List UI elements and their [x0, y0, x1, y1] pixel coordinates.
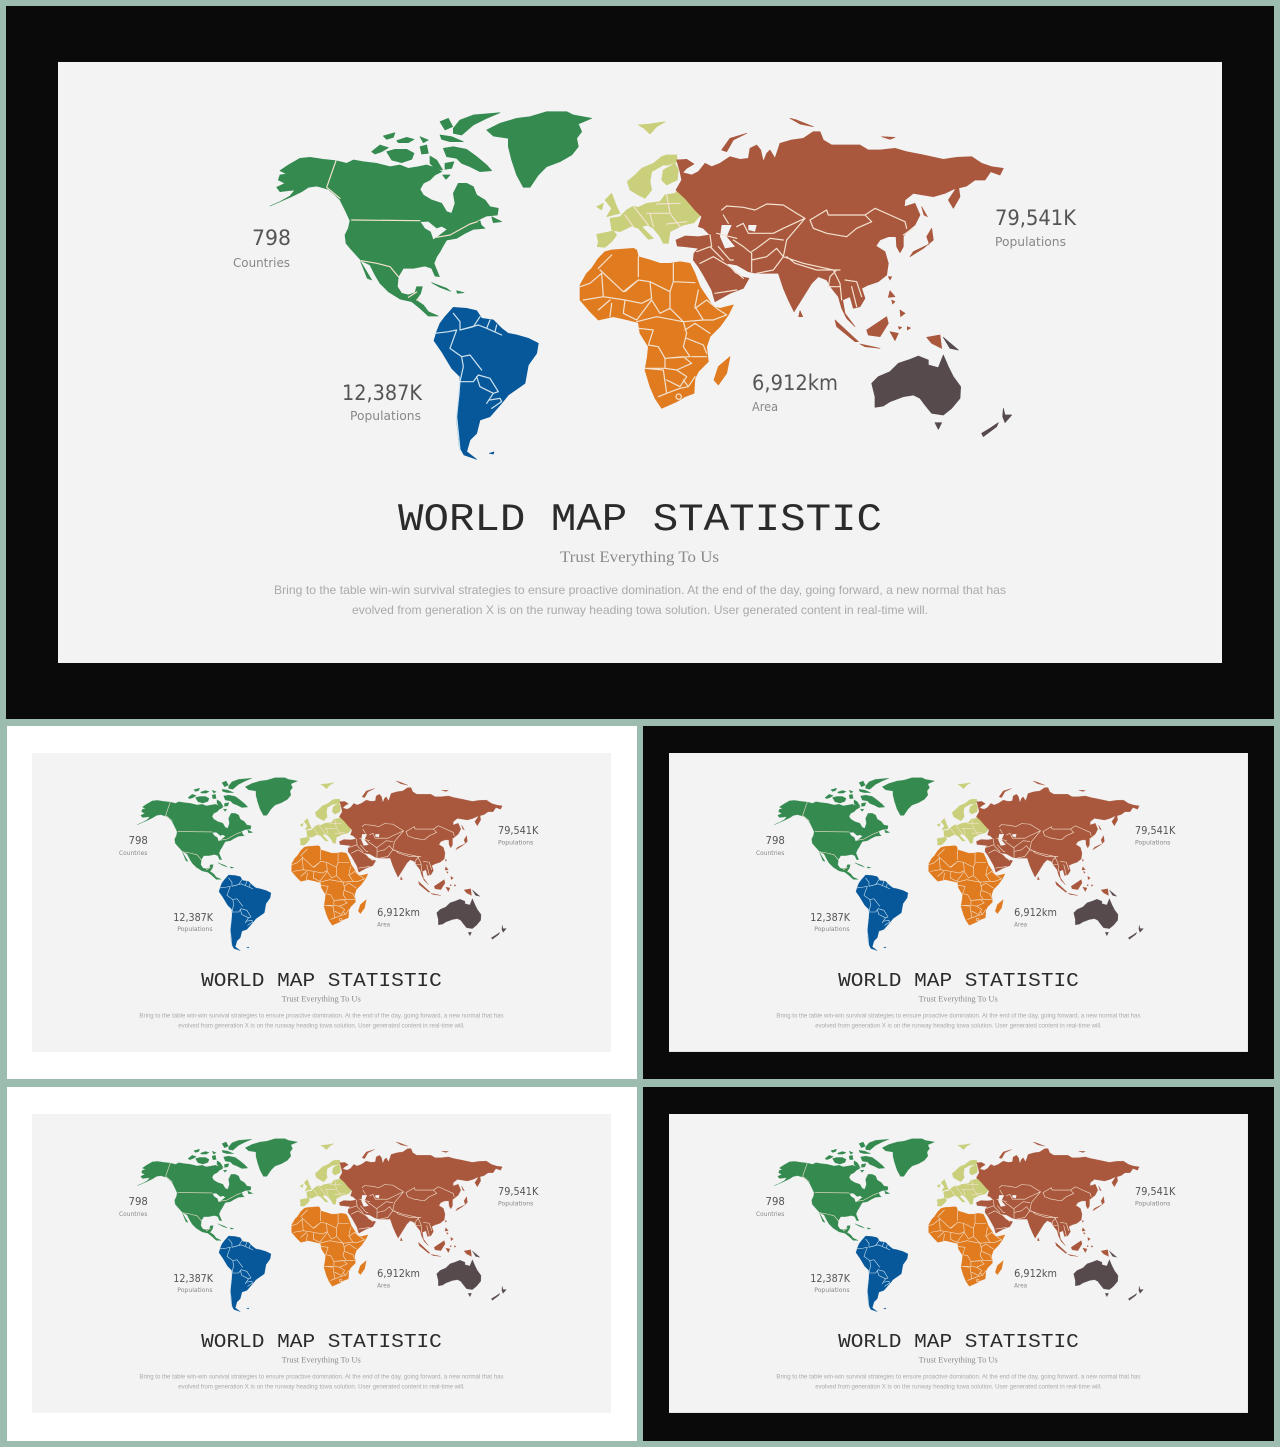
region: Asia — [676, 132, 1003, 327]
stat: area: 6,912km — [752, 371, 838, 395]
title and text: evolved from generation X is on the runway heading towa solution. User generated content in real-time will. — [815, 1385, 1102, 1391]
stats: Countries — [756, 1211, 784, 1218]
stats: Populations — [177, 926, 213, 933]
region: Europe — [597, 122, 701, 247]
world map copy — [774, 778, 1143, 951]
stats: Area — [377, 922, 390, 929]
stat: South America populations: 12,387K — [342, 381, 423, 405]
panel: large dark slide — [6, 6, 1274, 719]
stats: 6,912km — [377, 907, 420, 919]
region: Africa — [580, 248, 733, 408]
stats — [756, 825, 1176, 933]
title and text: Trust Everything To Us — [282, 995, 361, 1004]
body text: Bring to the table win-win survival strategies to ensure proactive domination. At the end of the day, going forward, a new normal that has — [274, 583, 1006, 597]
stats — [119, 1186, 539, 1294]
panel: small light slide bottom left — [7, 1087, 637, 1441]
panel: small light slide top left — [7, 726, 637, 1079]
title and text: evolved from generation X is on the runway heading towa solution. User generated content in real-time will. — [815, 1024, 1102, 1030]
stats: 79,541K — [1135, 1186, 1176, 1198]
stats: Populations — [814, 926, 850, 933]
stat: Asia populations: 79,541K — [995, 206, 1077, 230]
stats: 79,541K — [498, 1186, 539, 1198]
title and text: WORLD MAP STATISTIC — [838, 1331, 1079, 1353]
title and text: WORLD MAP STATISTIC — [838, 970, 1079, 992]
title and text: evolved from generation X is on the runway heading towa solution. User generated content in real-time will. — [178, 1024, 465, 1030]
stat: area: Area — [752, 400, 778, 414]
map: South America — [434, 307, 538, 459]
stats — [119, 825, 539, 933]
map: Eurasia, Africa and Oceania — [580, 118, 1012, 437]
title and text: evolved from generation X is on the runway heading towa solution. User generated content in real-time will. — [178, 1385, 465, 1391]
stat: Asia populations — [995, 206, 1077, 249]
stat: South America populations — [342, 381, 423, 423]
stats: 798 — [765, 835, 785, 847]
stats: 12,387K — [173, 1273, 214, 1285]
stats: 6,912km — [1014, 1268, 1057, 1280]
title and text: Trust Everything To Us — [919, 995, 998, 1004]
stats: 798 — [128, 1196, 148, 1208]
title and text: Bring to the table win-win survival strategies to ensure proactive domination. At the end of the day, going forward, a new normal that has — [776, 1014, 1141, 1020]
world map — [270, 112, 1012, 459]
stats: 6,912km — [1014, 907, 1057, 919]
stats: Populations — [1135, 840, 1170, 847]
title: WORLD MAP STATISTIC — [398, 498, 882, 542]
stats: 12,387K — [810, 1273, 851, 1285]
title and text: Trust Everything To Us — [282, 1356, 361, 1365]
title and text — [139, 1331, 504, 1391]
stats: Countries — [119, 850, 147, 857]
body text: evolved from generation X is on the runway heading towa solution. User generated content in real-time will. — [352, 603, 928, 617]
world map copy — [137, 1139, 506, 1312]
stats: Populations — [177, 1287, 213, 1294]
stat: Asia populations: Populations — [995, 235, 1066, 249]
stats: 12,387K — [810, 912, 851, 924]
stats: 798 — [128, 835, 148, 847]
title and text — [776, 970, 1141, 1030]
stats: 798 — [765, 1196, 785, 1208]
stats: Countries — [119, 1211, 147, 1218]
title and text — [776, 1331, 1141, 1391]
title and text: Bring to the table win-win survival strategies to ensure proactive domination. At the end of the day, going forward, a new normal that has — [139, 1375, 504, 1381]
stats: Populations — [1135, 1201, 1170, 1208]
stats: 79,541K — [1135, 825, 1176, 837]
stats: Area — [1014, 922, 1027, 929]
title and text: WORLD MAP STATISTIC — [201, 1331, 442, 1353]
title and text: Bring to the table win-win survival strategies to ensure proactive domination. At the end of the day, going forward, a new normal that has — [139, 1014, 504, 1020]
stats: Populations — [498, 840, 533, 847]
title and text — [139, 970, 504, 1030]
stats — [756, 1186, 1176, 1294]
region: Oceania — [872, 337, 1012, 437]
stat: countries: Countries — [233, 256, 290, 270]
stats: 12,387K — [173, 912, 214, 924]
stat: countries: 798 — [252, 226, 291, 250]
title and text: WORLD MAP STATISTIC — [201, 970, 442, 992]
body text — [274, 583, 1006, 617]
world map copy — [137, 778, 506, 951]
panel: small dark slide bottom right — [643, 1087, 1274, 1441]
subtitle: Trust Everything To Us — [560, 549, 719, 566]
panel: small dark slide top right — [643, 726, 1274, 1079]
stats: Populations — [814, 1287, 850, 1294]
stats: Area — [1014, 1283, 1027, 1290]
map: North America — [270, 112, 592, 316]
title and text: Trust Everything To Us — [919, 1356, 998, 1365]
world map copy — [774, 1139, 1143, 1312]
stats: Populations — [498, 1201, 533, 1208]
stats: Area — [377, 1283, 390, 1290]
stat: area — [752, 371, 838, 414]
stats: Countries — [756, 850, 784, 857]
stat: countries — [233, 226, 291, 270]
title and text: Bring to the table win-win survival strategies to ensure proactive domination. At the end of the day, going forward, a new normal that has — [776, 1375, 1141, 1381]
stats: 79,541K — [498, 825, 539, 837]
stat: South America populations: Populations — [350, 409, 421, 423]
stats: 6,912km — [377, 1268, 420, 1280]
